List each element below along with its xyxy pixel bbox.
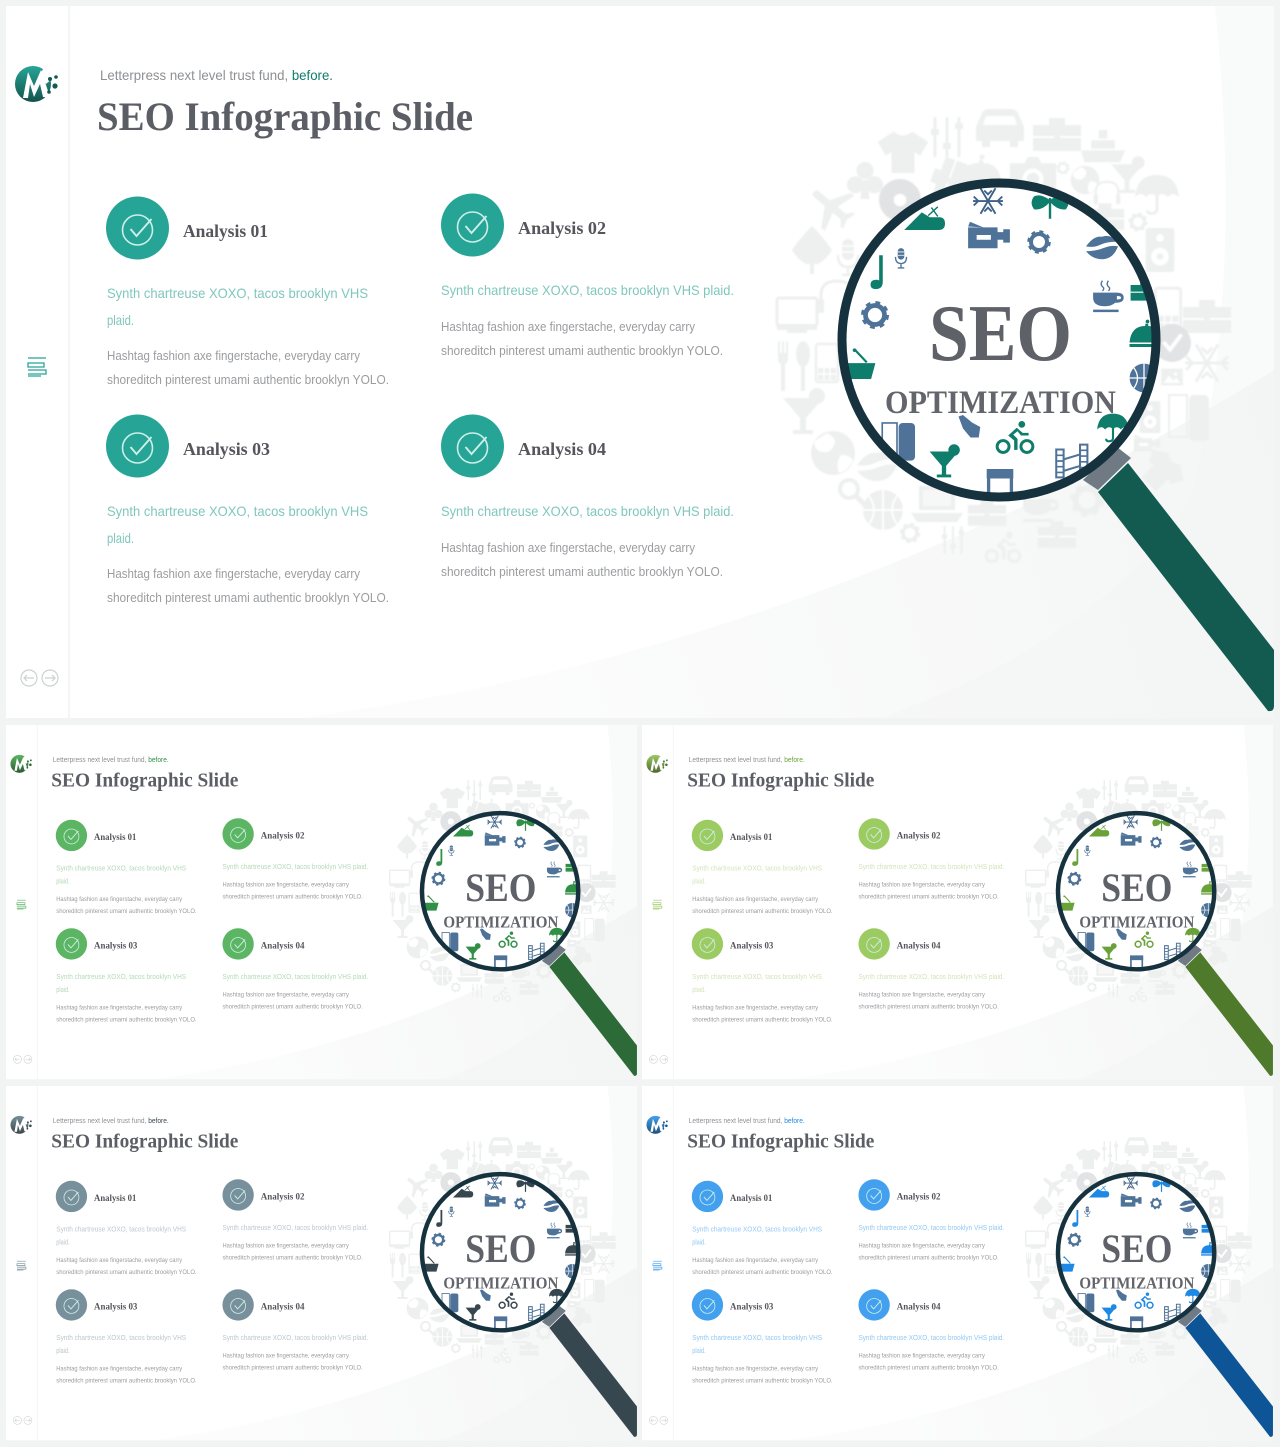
icon ring: gray background icons [390, 1137, 616, 1362]
icon: list [28, 358, 46, 376]
icon: list [653, 1261, 662, 1270]
panel: slate gray slide [6, 1086, 637, 1440]
item: Analysis 04: Synth chartreuse XOXO, tacos brooklyn VHS plaid. [222, 974, 368, 981]
item: Analysis 04: shoreditch pinterest umami authentic brooklyn YOLO. [222, 1365, 363, 1372]
item: Analysis 04: Synth chartreuse XOXO, tacos brooklyn VHS plaid. [441, 503, 734, 519]
item: Analysis 03: Synth chartreuse XOXO, tacos brooklyn VHS [56, 974, 186, 981]
item: Analysis 03: Hashtag fashion axe fingerstache, everyday carry [692, 1366, 819, 1373]
item: Analysis 02 [441, 194, 734, 358]
item: Analysis 01: Analysis 01 [94, 832, 136, 842]
magnifying glass with SEO text: SEO [1101, 866, 1172, 910]
title: SEO Infographic Slide [51, 1131, 239, 1153]
item: Analysis 01: shoreditch pinterest umami authentic brooklyn YOLO. [56, 908, 197, 915]
magnifying glass with SEO text: OPTIMIZATION [443, 913, 558, 932]
item: Analysis 02: Analysis 02 [518, 218, 606, 238]
item: Analysis 03: Analysis 03 [94, 940, 138, 950]
item: Analysis 01: Synth chartreuse XOXO, tacos brooklyn VHS [692, 865, 822, 872]
item: Analysis 03 [106, 414, 389, 605]
magnifying glass with SEO text: OPTIMIZATION [1079, 1274, 1194, 1293]
item: Analysis 03: Analysis 03 [730, 1301, 774, 1311]
item: Analysis 03 [56, 928, 197, 1024]
item: Analysis 01: Synth chartreuse XOXO, tacos brooklyn VHS [107, 285, 368, 301]
item: Analysis 04: Hashtag fashion axe fingerstache, everyday carry [858, 992, 986, 999]
item: Analysis 01: Analysis 01 [730, 832, 772, 842]
panel: green slide [6, 725, 637, 1079]
item: Analysis 04 [858, 928, 1004, 1011]
item: Analysis 01: shoreditch pinterest umami authentic brooklyn YOLO. [56, 1269, 197, 1276]
item: Analysis 04: Hashtag fashion axe fingerstache, everyday carry [441, 541, 696, 555]
item: Analysis 02: Hashtag fashion axe fingerstache, everyday carry [441, 320, 696, 334]
magnifying glass with SEO text: SEO [465, 866, 536, 910]
panel: main teal slide [6, 6, 1274, 718]
item: Analysis 02: Analysis 02 [261, 1191, 305, 1201]
item: Analysis 03: plaid. [56, 1348, 70, 1355]
icon ring: gray background icons [1026, 1137, 1252, 1362]
item: Analysis 04: Analysis 04 [261, 940, 305, 950]
item: Analysis 03: plaid. [56, 987, 70, 994]
subtitle: Letterpress next level trust fund, before. [689, 757, 805, 764]
icon: navigation arrows [21, 670, 58, 686]
item: Analysis 03 [692, 928, 833, 1024]
item: Analysis 03: Analysis 03 [183, 439, 270, 459]
magnifying glass with SEO text: SEO [929, 290, 1072, 378]
item: Analysis 03: Hashtag fashion axe fingerstache, everyday carry [56, 1005, 183, 1012]
item: Analysis 01 [56, 1181, 197, 1276]
logo [646, 755, 668, 773]
item: Analysis 02: Hashtag fashion axe fingerstache, everyday carry [222, 1243, 350, 1250]
item: Analysis 04 [441, 414, 734, 579]
item: Analysis 01: shoreditch pinterest umami authentic brooklyn YOLO. [692, 1269, 833, 1276]
item: Analysis 02: shoreditch pinterest umami authentic brooklyn YOLO. [441, 344, 723, 358]
item: Analysis 01: Hashtag fashion axe fingerstache, everyday carry [692, 1257, 819, 1264]
item: Analysis 03: Analysis 03 [730, 940, 774, 950]
logo [646, 1116, 668, 1134]
item: Analysis 01: Synth chartreuse XOXO, tacos brooklyn VHS [56, 865, 186, 872]
item: Analysis 01: Analysis 01 [730, 1193, 772, 1203]
item: Analysis 02: Analysis 02 [897, 830, 941, 840]
item: Analysis 03: plaid. [107, 530, 134, 546]
magnifying glass with SEO text [842, 183, 1274, 711]
item: Analysis 01: plaid. [56, 879, 70, 886]
item: Analysis 03: Analysis 03 [94, 1301, 138, 1311]
item: Analysis 04: Analysis 04 [261, 1301, 305, 1311]
magnifying glass with SEO text [422, 1174, 637, 1437]
item: Analysis 01: Synth chartreuse XOXO, tacos brooklyn VHS [56, 1226, 186, 1233]
item: Analysis 02: Hashtag fashion axe fingerstache, everyday carry [858, 882, 986, 889]
item: Analysis 02 [858, 1179, 1004, 1262]
item: Analysis 03: shoreditch pinterest umami authentic brooklyn YOLO. [56, 1378, 197, 1385]
icon ring: gray background icons [777, 109, 1231, 562]
icon: navigation arrows [649, 1055, 668, 1063]
item: Analysis 02: Synth chartreuse XOXO, tacos brooklyn VHS plaid. [222, 864, 368, 871]
logo [10, 755, 32, 773]
item: Analysis 04 [222, 1289, 368, 1372]
logo [10, 1116, 32, 1134]
icon: list [17, 1261, 26, 1270]
item: Analysis 04 [222, 928, 368, 1011]
icon: navigation arrows [13, 1055, 32, 1063]
item: Analysis 01: plaid. [56, 1240, 70, 1247]
subtitle: Letterpress next level trust fund, before. [53, 757, 169, 764]
item: Analysis 02: shoreditch pinterest umami authentic brooklyn YOLO. [858, 1255, 999, 1262]
magnifying glass with SEO text: SEO [465, 1227, 536, 1271]
item: Analysis 01: plaid. [692, 879, 706, 886]
item: Analysis 01 [692, 1181, 833, 1276]
item: Analysis 01: Hashtag fashion axe fingerstache, everyday carry [692, 896, 819, 903]
magnifying glass with SEO text [1058, 1174, 1273, 1437]
item: Analysis 04: Synth chartreuse XOXO, tacos brooklyn VHS plaid. [858, 974, 1004, 981]
item: Analysis 04: Synth chartreuse XOXO, tacos brooklyn VHS plaid. [858, 1335, 1004, 1342]
logo [15, 66, 58, 102]
item: Analysis 04: shoreditch pinterest umami authentic brooklyn YOLO. [222, 1004, 363, 1011]
title: SEO Infographic Slide [51, 770, 239, 792]
title: SEO Infographic Slide [97, 94, 473, 139]
item: Analysis 02 [222, 818, 368, 901]
item: Analysis 03: Hashtag fashion axe fingerstache, everyday carry [56, 1366, 183, 1373]
item: Analysis 04: shoreditch pinterest umami authentic brooklyn YOLO. [858, 1365, 999, 1372]
icon: list [17, 900, 26, 909]
item: Analysis 03: Hashtag fashion axe fingerstache, everyday carry [692, 1005, 819, 1012]
magnifying glass with SEO text: OPTIMIZATION [885, 385, 1116, 421]
item: Analysis 04: shoreditch pinterest umami authentic brooklyn YOLO. [858, 1004, 999, 1011]
item: Analysis 03: plaid. [692, 987, 706, 994]
item: Analysis 04: Analysis 04 [518, 439, 606, 459]
item: Analysis 01 [56, 820, 197, 915]
title: SEO Infographic Slide [687, 770, 875, 792]
item: Analysis 03: Synth chartreuse XOXO, tacos brooklyn VHS [56, 1335, 186, 1342]
icon: navigation arrows [13, 1416, 32, 1424]
subtitle: Letterpress next level trust fund, before. [53, 1118, 169, 1125]
item: Analysis 03 [56, 1289, 197, 1385]
icon: list [653, 900, 662, 909]
panel: olive slide [642, 725, 1273, 1079]
item: Analysis 02: shoreditch pinterest umami authentic brooklyn YOLO. [222, 894, 363, 901]
item: Analysis 03: shoreditch pinterest umami authentic brooklyn YOLO. [107, 591, 389, 605]
item: Analysis 03: Synth chartreuse XOXO, tacos brooklyn VHS [692, 1335, 822, 1342]
subtitle: Letterpress next level trust fund, before. [100, 67, 333, 83]
title: SEO Infographic Slide [687, 1131, 875, 1153]
item: Analysis 01: plaid. [692, 1240, 706, 1247]
subtitle: Letterpress next level trust fund, before. [689, 1118, 805, 1125]
item: Analysis 01: Analysis 01 [94, 1193, 136, 1203]
magnifying glass with SEO text: OPTIMIZATION [1079, 913, 1194, 932]
item: Analysis 01: Hashtag fashion axe fingerstache, everyday carry [56, 1257, 183, 1264]
item: Analysis 02 [222, 1179, 368, 1262]
item: Analysis 04: Analysis 04 [897, 1301, 941, 1311]
item: Analysis 01: Hashtag fashion axe fingerstache, everyday carry [107, 349, 361, 363]
item: Analysis 03: shoreditch pinterest umami authentic brooklyn YOLO. [692, 1017, 833, 1024]
item: Analysis 02: shoreditch pinterest umami authentic brooklyn YOLO. [858, 894, 999, 901]
icon ring: gray background icons [390, 776, 616, 1001]
item: Analysis 01: Analysis 01 [183, 221, 268, 241]
item: Analysis 02: Synth chartreuse XOXO, tacos brooklyn VHS plaid. [222, 1225, 368, 1232]
item: Analysis 01 [692, 820, 833, 915]
magnifying glass with SEO text: SEO [1101, 1227, 1172, 1271]
item: Analysis 01: Hashtag fashion axe fingerstache, everyday carry [56, 896, 183, 903]
item: Analysis 04: shoreditch pinterest umami authentic brooklyn YOLO. [441, 565, 723, 579]
item: Analysis 01: plaid. [107, 312, 134, 328]
item: Analysis 03: Hashtag fashion axe fingerstache, everyday carry [107, 567, 361, 581]
item: Analysis 04: Synth chartreuse XOXO, tacos brooklyn VHS plaid. [222, 1335, 368, 1342]
item: Analysis 02: Analysis 02 [897, 1191, 941, 1201]
item: Analysis 01: Synth chartreuse XOXO, tacos brooklyn VHS [692, 1226, 822, 1233]
magnifying glass with SEO text [422, 813, 637, 1076]
item: Analysis 04: Hashtag fashion axe fingerstache, everyday carry [222, 992, 350, 999]
item: Analysis 03: shoreditch pinterest umami authentic brooklyn YOLO. [692, 1378, 833, 1385]
magnifying glass with SEO text: OPTIMIZATION [443, 1274, 558, 1293]
item: Analysis 01 [106, 196, 389, 387]
item: Analysis 04: Hashtag fashion axe fingerstache, everyday carry [858, 1353, 986, 1360]
item: Analysis 04: Hashtag fashion axe fingerstache, everyday carry [222, 1353, 350, 1360]
item: Analysis 02: Hashtag fashion axe fingerstache, everyday carry [222, 882, 350, 889]
item: Analysis 02: shoreditch pinterest umami authentic brooklyn YOLO. [222, 1255, 363, 1262]
item: Analysis 02: Hashtag fashion axe fingerstache, everyday carry [858, 1243, 986, 1250]
item: Analysis 02: Synth chartreuse XOXO, tacos brooklyn VHS plaid. [858, 1225, 1004, 1232]
magnifying glass with SEO text [1058, 813, 1273, 1076]
item: Analysis 01: shoreditch pinterest umami authentic brooklyn YOLO. [692, 908, 833, 915]
item: Analysis 03: Synth chartreuse XOXO, tacos brooklyn VHS [107, 503, 368, 519]
item: Analysis 03: shoreditch pinterest umami authentic brooklyn YOLO. [56, 1017, 197, 1024]
icon ring: gray background icons [1026, 776, 1252, 1001]
item: Analysis 02 [858, 818, 1004, 901]
item: Analysis 02: Synth chartreuse XOXO, tacos brooklyn VHS plaid. [441, 282, 734, 298]
item: Analysis 01: shoreditch pinterest umami authentic brooklyn YOLO. [107, 373, 389, 387]
panel: blue slide [642, 1086, 1273, 1440]
item: Analysis 03: Synth chartreuse XOXO, tacos brooklyn VHS [692, 974, 822, 981]
item: Analysis 03: plaid. [692, 1348, 706, 1355]
icon: navigation arrows [649, 1416, 668, 1424]
item: Analysis 02: Analysis 02 [261, 830, 305, 840]
item: Analysis 04 [858, 1289, 1004, 1372]
item: Analysis 04: Analysis 04 [897, 940, 941, 950]
item: Analysis 02: Synth chartreuse XOXO, tacos brooklyn VHS plaid. [858, 864, 1004, 871]
item: Analysis 03 [692, 1289, 833, 1385]
